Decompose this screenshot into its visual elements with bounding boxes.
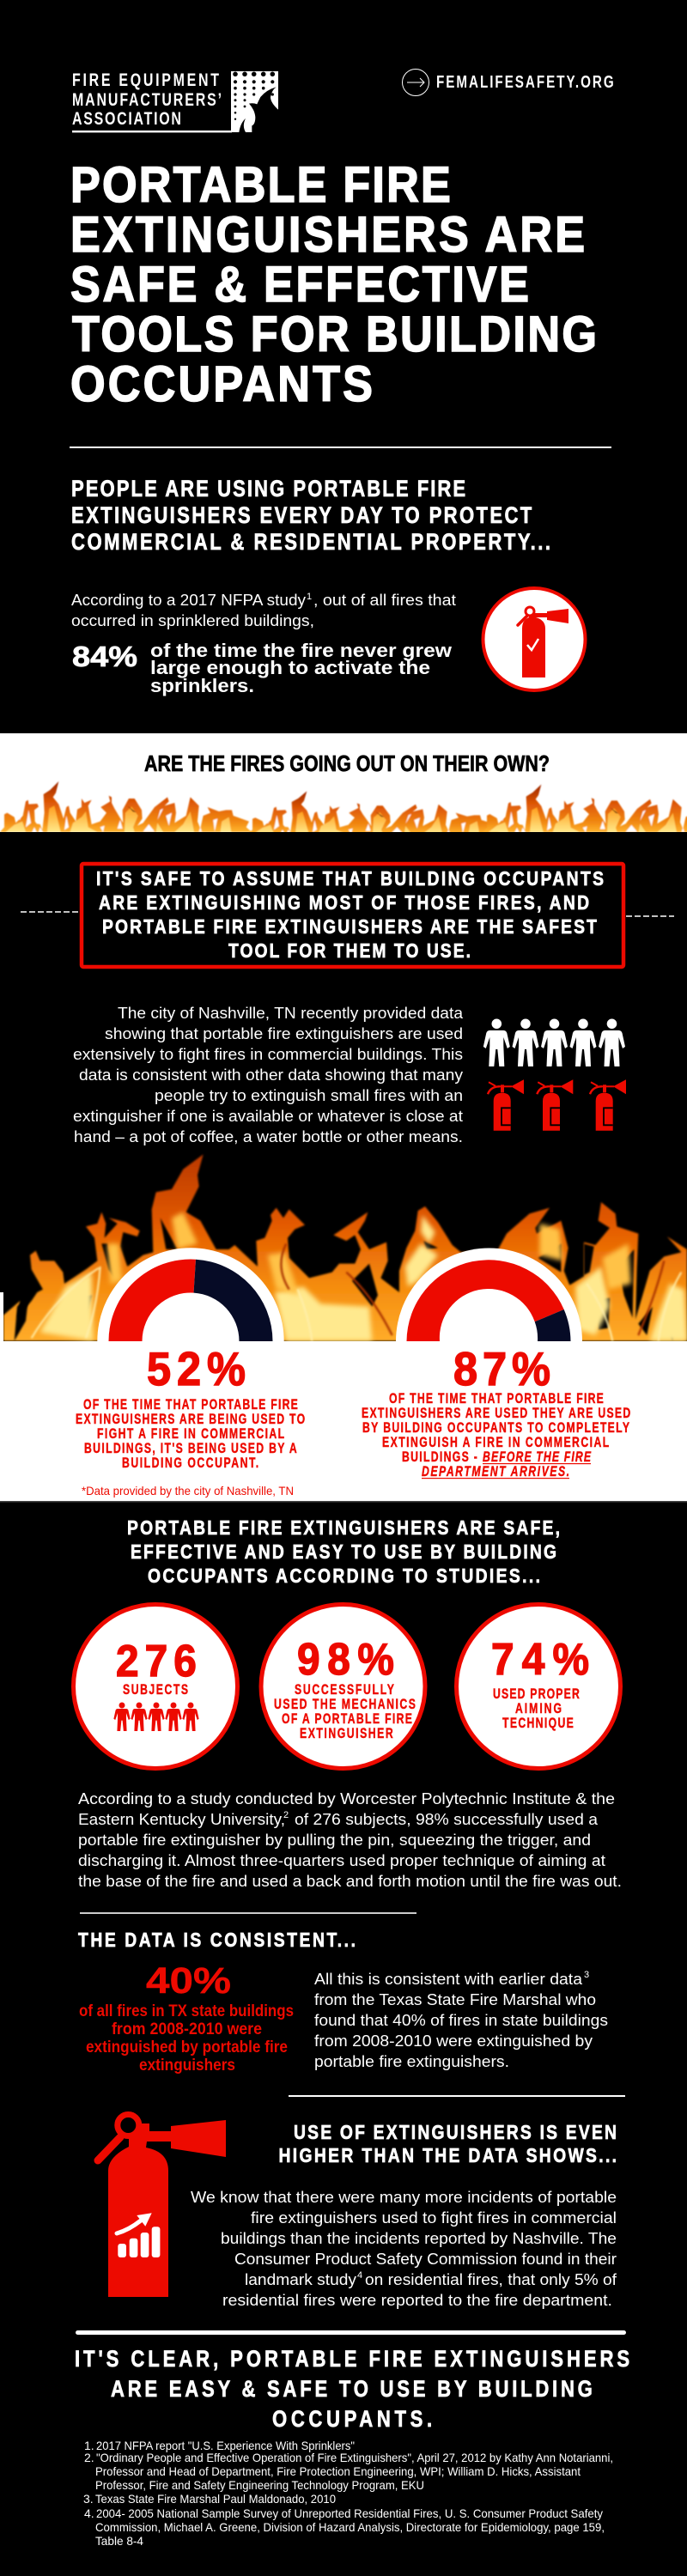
icon: five red people — [113, 1702, 199, 1731]
callout: safe to assume: PORTABLE FIRE EXTINGUISHERS ARE THE SAFEST — [102, 917, 597, 938]
text: WPI and EKU study: Eastern Kentucky University, — [78, 1811, 285, 1828]
references: Texas State Fire Marshal Paul Maldonado, 2010 — [95, 2492, 336, 2506]
website link with arrow icon: FEMALIFESAFETY.ORG — [436, 72, 614, 92]
heading: use is even higher: HIGHER THAN THE DATA SHOWS... — [278, 2146, 617, 2166]
heading: the data is consistent: THE DATA IS CONSISTENT... — [78, 1930, 356, 1951]
text: Nashville data: people try to extinguish small fires with an — [155, 1087, 463, 1104]
title: OCCUPANTS — [70, 355, 373, 412]
references: Professor, Fire and Safety Engineering Technology Program, EKU — [95, 2478, 424, 2492]
stat circle: 276 subjects: SUBJECTS — [123, 1682, 188, 1698]
stat: 87 percent: EXTINGUISH A FIRE IN COMMERCIAL — [382, 1435, 609, 1451]
stat circle: 98 percent: OF A PORTABLE FIRE — [282, 1711, 412, 1728]
title: SAFE & EFFECTIVE — [70, 256, 529, 313]
flames strip — [0, 781, 687, 834]
stat: 40 percent: extinguished by portable fire — [86, 2038, 288, 2057]
text: Nashville data: showing that portable fire extinguishers are used — [105, 1025, 463, 1042]
stat: 52 percent: OF THE TIME THAT PORTABLE FIRE — [83, 1397, 298, 1413]
heading: according to studies: PORTABLE FIRE EXTINGUISHERS ARE SAFE, — [127, 1518, 560, 1539]
callout: safe to assume: IT'S SAFE TO ASSUME THAT BUILDING OCCUPANTS — [96, 869, 604, 890]
callout: safe to assume: ARE EXTINGUISHING MOST OF THOSE FIRES, AND — [99, 893, 589, 914]
icon: extinguisher in circle — [483, 588, 586, 690]
text: NFPA study: According to a 2017 NFPA study — [71, 592, 306, 609]
text: Texas State Fire Marshal: from the Texas State Fire Marshal who — [314, 1991, 596, 2008]
text: Consumer Product Safety Commission: landmark study — [245, 2271, 356, 2288]
references: Commission, Michael A. Greene, Division of Hazard Analysis, Directorate for Epidemiology, page 159, — [95, 2520, 605, 2534]
heading: people are using: COMMERCIAL & RESIDENTIAL PROPERTY... — [71, 530, 550, 556]
stat: 87 percent: OF THE TIME THAT PORTABLE FIRE — [389, 1391, 604, 1407]
heading: according to studies: EFFECTIVE AND EASY TO USE BY BUILDING — [131, 1542, 556, 1563]
references: Table 8-4 — [95, 2534, 143, 2548]
title: TOOLS FOR BUILDING — [72, 306, 597, 362]
text: WPI and EKU study: According to a study conducted by Worcester Polytechnic Institute & the — [78, 1790, 615, 1807]
text: Consumer Product Safety Commission — [191, 2189, 617, 2309]
stat: 40 percent: extinguishers — [139, 2057, 235, 2075]
stat circle: 98 percent: EXTINGUISHER — [300, 1726, 393, 1742]
references — [83, 2439, 613, 2548]
stat: 84 percent: large enough to activate the — [150, 657, 430, 678]
text: Consumer Product Safety Commission: Consumer Product Safety Commission found in their — [234, 2251, 617, 2268]
conclusion heading — [75, 2347, 629, 2433]
white band: question with flames — [0, 733, 687, 832]
stat: 87 percent: BY BUILDING OCCUPANTS TO COMPLETELY — [362, 1420, 629, 1437]
photo: big flames — [3, 1154, 687, 1341]
chart: 87 percent gauge — [396, 1249, 582, 1341]
references: 2017 NFPA report "U.S. Experience With Sprinklers" — [96, 2439, 355, 2452]
references: 2. — [84, 2451, 94, 2464]
text: Consumer Product Safety Commission: on residential fires, that only 5% of — [365, 2271, 617, 2288]
stat circle: 74 percent: 74% — [491, 1634, 589, 1684]
references: "Ordinary People and Effective Operation of Fire Extinguishers", April 27, 2012 by Kathy Ann Notarianni, — [96, 2451, 613, 2464]
heading: are the fires going out: ARE THE FIRES GOING OUT ON THEIR OWN? — [144, 750, 550, 776]
heading: according to studies: OCCUPANTS ACCORDING TO STUDIES... — [148, 1566, 540, 1587]
stat: 40 percent — [79, 1960, 294, 2075]
stat circle: 74 percent: AIMING — [515, 1701, 562, 1717]
heading: use is even higher — [278, 2123, 617, 2166]
references: 3. — [83, 2492, 94, 2506]
text: NFPA study: , out of all fires that — [313, 592, 456, 609]
stat: 52 percent: EXTINGUISHERS ARE BEING USED TO — [76, 1412, 305, 1428]
title: PORTABLE FIRE — [70, 156, 451, 213]
text: Texas State Fire Marshal: 3 — [584, 1970, 589, 1980]
references: 1. — [84, 2439, 94, 2452]
icon: five people — [483, 1018, 625, 1066]
logo: Fire Equipment Manufacturers' Association: FIRE EQUIPMENT — [72, 70, 220, 90]
stat: 52 percent: 52% — [147, 1343, 246, 1395]
stat: 40 percent: from 2008-2010 were — [112, 2020, 262, 2038]
text: NFPA study — [71, 592, 456, 629]
text: WPI and EKU study — [78, 1790, 622, 1890]
logo: Fire Equipment Manufacturers' Association — [72, 70, 278, 132]
conclusion heading: ARE EASY & SAFE TO USE BY BUILDING — [111, 2377, 593, 2403]
title: EXTINGUISHERS ARE — [70, 206, 585, 263]
text: Texas State Fire Marshal: All this is consistent with earlier data — [314, 1971, 583, 1988]
text: NFPA study: 1 — [307, 592, 312, 602]
logo: Fire Equipment Manufacturers' Association: ASSOCIATION — [72, 108, 181, 129]
stat: 52 percent: BUILDING OCCUPANT. — [122, 1455, 258, 1472]
text: Texas State Fire Marshal: portable fire extinguishers. — [314, 2053, 509, 2070]
stat: 52 percent: BUILDINGS, IT'S BEING USED BY A — [84, 1441, 297, 1457]
text: WPI and EKU study: of 276 subjects, 98% successfully used a — [295, 1811, 599, 1828]
text: Texas State Fire Marshal: from 2008-2010 were extinguished by — [314, 2032, 593, 2050]
chart: 52 percent gauge — [97, 1248, 284, 1341]
references: Professor and Head of Department, Fire Protection Engineering, WPI; William D. Hicks, Assistant — [95, 2464, 581, 2478]
stat: 87 percent: EXTINGUISHERS ARE USED THEY ARE USED — [362, 1406, 630, 1422]
stat circle: 98 percent: SUCCESSFULLY — [295, 1682, 394, 1698]
text: Nashville data: data is consistent with other data showing that many — [79, 1066, 463, 1084]
stat: 87 percent: 87% — [453, 1343, 550, 1395]
text: Consumer Product Safety Commission: residential fires were reported to the fire department. — [222, 2292, 612, 2309]
heading: people are using: EXTINGUISHERS EVERY DAY TO PROTECT — [71, 503, 532, 529]
stat: 40 percent: of all fires in TX state buildings — [79, 2002, 294, 2020]
text: Texas State Fire Marshal: found that 40% of fires in state buildings — [314, 2012, 608, 2029]
stat circle: 74 percent: TECHNIQUE — [502, 1716, 574, 1732]
stat: 87 percent — [362, 1343, 630, 1480]
stat: 87 percent: DEPARTMENT ARRIVES. — [422, 1464, 569, 1480]
text: WPI and EKU study: 2 — [283, 1810, 289, 1820]
callout: safe to assume: TOOL FOR THEM TO USE. — [228, 941, 471, 962]
footnote: data source: *Data provided by the city of Nashville, TN — [82, 1484, 294, 1498]
stat: 84 percent: 84% — [72, 641, 137, 672]
stat circle: 98 percent: USED THE MECHANICS — [274, 1697, 416, 1713]
stat: 87 percent: BEFORE THE FIRE — [483, 1449, 592, 1466]
callout: safe to assume — [82, 864, 623, 967]
website link with arrow icon — [402, 69, 614, 96]
text: Nashville data: hand – a pot of coffee, a water bottle or other means. — [74, 1128, 463, 1145]
references: 2004- 2005 National Sample Survey of Unreported Residential Fires, U. S. Consumer Product Safety — [96, 2506, 603, 2520]
text: Consumer Product Safety Commission: fire extinguishers used to fight fires in commercial — [251, 2209, 617, 2227]
icon: large extinguisher with growth chart — [98, 2114, 226, 2297]
text: Nashville data — [73, 1005, 464, 1145]
stat circle: 276 subjects — [74, 1604, 237, 1769]
stat circle: 98 percent — [261, 1604, 425, 1769]
text: NFPA study: occurred in sprinklered buildings, — [71, 612, 314, 629]
stat: 84 percent: of the time the fire never grew — [150, 640, 453, 661]
text: Consumer Product Safety Commission: We know that there were many more incidents of portable — [191, 2189, 617, 2206]
stat circle: 74 percent: USED PROPER — [493, 1686, 580, 1703]
text: WPI and EKU study: portable fire extinguisher by pulling the pin, squeezing the trigger, and — [78, 1832, 591, 1849]
text: Consumer Product Safety Commission: buildings than the incidents reported by Nashville. The — [221, 2230, 617, 2247]
stat: 52 percent: FIGHT A FIRE IN COMMERCIAL — [97, 1426, 284, 1443]
white panel: gauges and stats — [0, 1292, 687, 1503]
text: Nashville data: extinguisher if one is available or whatever is close at — [73, 1108, 463, 1125]
heading: use is even higher: USE OF EXTINGUISHERS IS EVEN — [294, 2123, 617, 2143]
heading: people are using — [71, 477, 550, 556]
stat circle: 74 percent — [457, 1604, 620, 1769]
text: Consumer Product Safety Commission: 4 — [357, 2270, 362, 2281]
stat: 84 percent — [72, 640, 453, 696]
text: Nashville data: The city of Nashville, TN recently provided data — [118, 1005, 464, 1022]
stat circle: 98 percent: 98% — [297, 1634, 394, 1684]
text: Nashville data: extensively to fight fires in commercial buildings. This — [73, 1046, 463, 1063]
heading: people are using: PEOPLE ARE USING PORTABLE FIRE — [71, 477, 465, 502]
text: WPI and EKU study: discharging it. Almost three-quarters used proper technique of aiming at — [78, 1852, 605, 1869]
conclusion heading: OCCUPANTS. — [272, 2407, 432, 2433]
text: WPI and EKU study: the base of the fire and used a back and forth motion until the fire was out. — [78, 1873, 622, 1890]
stat circle: 276 subjects: 276 — [116, 1636, 197, 1686]
logo: Fire Equipment Manufacturers' Association: MANUFACTURERS’ — [72, 89, 222, 110]
references: 4. — [84, 2506, 94, 2520]
stat: 87 percent: BUILDINGS - — [402, 1449, 477, 1466]
icon: three extinguishers — [488, 1079, 626, 1131]
conclusion heading: IT'S CLEAR, PORTABLE FIRE EXTINGUISHERS — [75, 2347, 629, 2372]
stat: 40 percent: 40% — [146, 1960, 231, 2002]
stat: 84 percent: sprinklers. — [150, 675, 254, 696]
text: Texas State Fire Marshal — [314, 1970, 608, 2070]
heading: according to studies — [127, 1518, 560, 1587]
stat: 52 percent — [76, 1343, 305, 1472]
title — [70, 156, 597, 412]
